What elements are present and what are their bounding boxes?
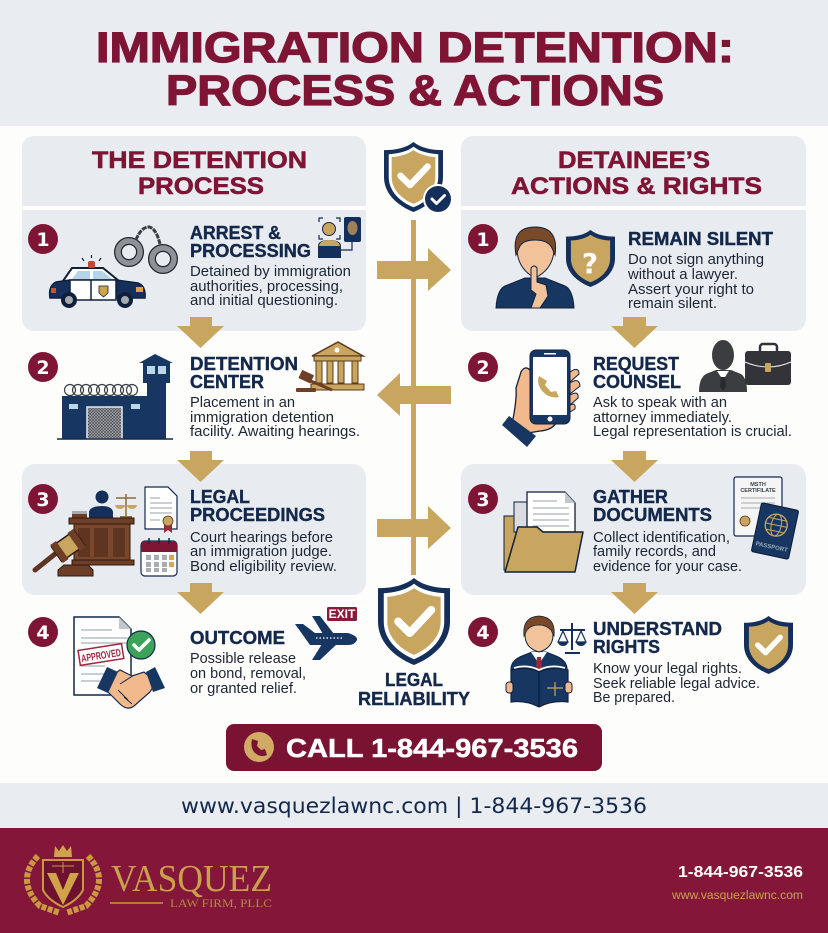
number badge 4 xyxy=(28,617,58,647)
footer phone and website xyxy=(671,864,803,902)
text: remain silent: remain silent. xyxy=(628,296,717,312)
text: outcome: on bond, removal, xyxy=(190,666,306,682)
text: understand rights: RIGHTS xyxy=(593,637,660,657)
text: legal proceedings: PROCEEDINGS xyxy=(190,505,325,525)
text: gather documents: family records, and xyxy=(593,544,716,560)
icon: hand holding phone xyxy=(502,350,580,447)
arrow: left middle xyxy=(377,373,451,416)
footer xyxy=(0,828,828,933)
footer phone and website: www.vasquezlawnc.com xyxy=(671,890,803,902)
number badge 1 xyxy=(28,224,58,254)
arrow: right bottom xyxy=(377,506,451,549)
text: arrest and processing: Detained by immigration xyxy=(190,264,351,280)
number badge 4: 4 xyxy=(476,622,490,644)
icon: certificate and passport: MSTH xyxy=(750,482,766,488)
text: legal proceedings: an immigration judge. xyxy=(190,544,332,560)
icon: folder with papers xyxy=(504,492,583,572)
icon: airplane with exit sign: EXIT xyxy=(329,607,356,621)
logo: Vasquez Law Firm crest: VASQUEZ xyxy=(111,858,272,900)
icon: shield with question mark xyxy=(566,230,615,287)
icon: certificate and passport: PASSPORT xyxy=(755,541,788,554)
text: request counsel: COUNSEL xyxy=(593,372,681,392)
icon: courthouse and gavel xyxy=(296,342,364,392)
text: request counsel xyxy=(593,354,792,440)
contact band: www.vasquezlawnc.com | 1-844-967-3536 xyxy=(181,794,647,819)
panel: detainee actions heading xyxy=(461,136,806,206)
icon: police car xyxy=(50,255,145,308)
step: right 4 understand rights xyxy=(468,616,793,707)
panel: detainee actions heading: DETAINEE’S xyxy=(558,147,710,174)
panel: right step 3 background xyxy=(461,464,806,595)
arrow: left down 1 xyxy=(177,317,224,348)
text: request counsel: Ask to speak with an xyxy=(593,395,727,411)
text: understand rights: UNDERSTAND xyxy=(593,619,722,639)
logo: Vasquez Law Firm crest: LAW FIRM, PLLC xyxy=(170,896,272,910)
text: detention center: Placement in an xyxy=(190,395,295,411)
panel: left step 3 background xyxy=(22,464,366,595)
text: remain silent: Assert your right to xyxy=(628,282,754,298)
text: detention center: immigration detention xyxy=(190,410,334,426)
icon: certificate and passport: CERTIFILATE xyxy=(740,488,776,494)
text: detention center: CENTER xyxy=(190,372,264,392)
logo: Vasquez Law Firm crest xyxy=(27,845,272,913)
icon: person gesturing silence xyxy=(496,227,574,308)
text: remain silent: REMAIN SILENT xyxy=(628,229,773,249)
title: IMMIGRATION DETENTION: xyxy=(96,24,734,72)
text: outcome: Possible release xyxy=(190,651,296,667)
panel: detention process heading: PROCESS xyxy=(138,173,264,200)
step: right 2 request counsel xyxy=(468,340,792,447)
icon: biometric processing xyxy=(318,217,361,258)
arrow: left down 3 xyxy=(177,583,224,614)
step: left 2 detention center xyxy=(28,342,364,440)
text: detention center: facility. Awaiting hearings. xyxy=(190,424,360,440)
step: left 3 legal proceedings xyxy=(28,484,337,576)
number badge 2: 2 xyxy=(476,357,490,379)
text: request counsel: REQUEST xyxy=(593,354,679,374)
number badge 3 xyxy=(468,484,498,514)
number badge 2 xyxy=(468,352,498,382)
icon: scales of justice xyxy=(558,623,586,653)
text: legal proceedings: Court hearings before xyxy=(190,530,333,546)
contact band xyxy=(0,783,828,828)
icon: attorney and briefcase xyxy=(699,340,791,392)
text: legal proceedings: Bond eligibility review. xyxy=(190,559,337,575)
text: request counsel: attorney immediately. xyxy=(593,410,732,426)
number badge 4 xyxy=(468,617,498,647)
icon: approved document and handshake xyxy=(74,617,165,708)
icon: calendar xyxy=(141,538,177,576)
panel: detainee actions heading: ACTIONS & RIGHTS xyxy=(511,173,762,200)
text: arrest and processing: PROCESSING xyxy=(190,241,311,261)
text: gather documents xyxy=(593,487,742,575)
icon: detention facility xyxy=(57,354,173,439)
text: gather documents: DOCUMENTS xyxy=(593,505,712,525)
text: gather documents: evidence for your case. xyxy=(593,559,742,575)
icon: legal document with seal xyxy=(145,487,177,533)
text: remain silent: Do not sign anything xyxy=(628,252,764,268)
text: outcome: or granted relief. xyxy=(190,681,297,697)
icon: airplane with exit sign xyxy=(295,607,357,660)
arrow: right down 1 xyxy=(611,317,658,348)
text: remain silent: without a lawyer. xyxy=(627,267,738,283)
arrow: right down 2 xyxy=(611,451,658,482)
call to action button: CALL 1-844-967-3536 xyxy=(286,733,578,763)
text: gather documents: GATHER xyxy=(593,487,668,507)
text: detention center xyxy=(190,354,360,440)
footer phone and website: 1-844-967-3536 xyxy=(678,864,803,881)
text: arrest and processing: and initial questioning. xyxy=(190,293,338,309)
text: understand rights: Be prepared. xyxy=(593,690,675,706)
number badge 1: 1 xyxy=(476,229,490,251)
title xyxy=(96,24,734,115)
number badge 3: 3 xyxy=(476,489,490,511)
number badge 3: 3 xyxy=(36,489,50,511)
text: understand rights: Seek reliable legal advice. xyxy=(593,676,760,692)
text: legal proceedings xyxy=(190,487,337,575)
panel: detention process heading: THE DETENTION xyxy=(92,147,307,174)
panel: detention process heading xyxy=(22,136,366,206)
icon: man reading law book xyxy=(506,616,572,707)
step: right 3 gather documents xyxy=(468,477,799,575)
arrow: right down 3 xyxy=(611,583,658,614)
step: left 1 arrest and processing xyxy=(22,210,366,331)
icon: certificate and passport xyxy=(734,477,799,559)
arrow: left down 2 xyxy=(177,451,224,482)
number badge 1 xyxy=(468,224,498,254)
text: understand rights xyxy=(593,619,760,706)
title: PROCESS & ACTIONS xyxy=(166,67,664,115)
text: outcome: OUTCOME xyxy=(190,628,285,648)
number badge 3 xyxy=(28,484,58,514)
icon: judge at court bench with gavel xyxy=(35,490,137,576)
text: arrest and processing: ARREST & xyxy=(190,223,281,243)
number badge 4: 4 xyxy=(36,622,50,644)
text: remain silent xyxy=(627,229,773,312)
icon: top shield with check xyxy=(384,142,453,214)
icon: shield with question mark: ? xyxy=(582,247,598,280)
legal reliability badge: RELIABILITY xyxy=(358,689,470,709)
number badge 2: 2 xyxy=(36,357,50,379)
text: arrest and processing xyxy=(190,223,351,309)
number badge 1: 1 xyxy=(36,229,50,251)
center timeline line xyxy=(411,220,416,575)
text: request counsel: Legal representation is crucial. xyxy=(593,424,792,440)
number badge 2 xyxy=(28,352,58,382)
text: understand rights: Know your legal rights. xyxy=(593,661,742,677)
icon: shield with check xyxy=(744,616,793,674)
text: arrest and processing: authorities, processing, xyxy=(190,279,343,295)
text: detention center: DETENTION xyxy=(190,354,298,374)
text: legal proceedings: LEGAL xyxy=(190,487,250,507)
arrow: right top xyxy=(377,248,451,291)
icon: handcuffs xyxy=(118,227,174,270)
icon: approved document and handshake: APPROVED xyxy=(80,647,122,665)
call to action button xyxy=(226,724,602,771)
panel: page header xyxy=(0,0,828,126)
text: gather documents: Collect identification, xyxy=(593,530,730,546)
step: left 4 outcome xyxy=(28,607,357,708)
legal reliability badge: LEGAL xyxy=(385,670,443,690)
step: right 1 remain silent xyxy=(461,210,806,331)
text: outcome xyxy=(190,628,306,697)
legal reliability badge xyxy=(358,578,470,709)
